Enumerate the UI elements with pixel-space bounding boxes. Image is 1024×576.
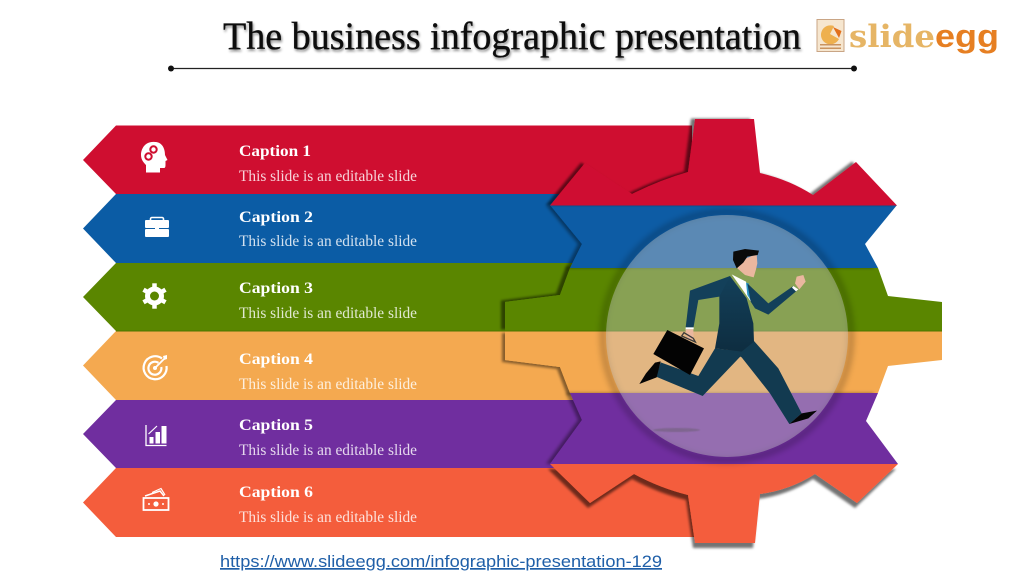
caption 3: Caption 3 — [239, 280, 313, 297]
torso — [715, 276, 754, 352]
band: purple arrow — [83, 400, 610, 468]
head — [737, 254, 757, 277]
caption 1: This slide is an editable slide — [239, 168, 417, 185]
running businessman — [639, 249, 817, 432]
band: coral arrow — [83, 468, 695, 537]
caption 5: This slide is an editable slide — [239, 442, 417, 459]
band: green arrow — [83, 263, 610, 331]
source link text: https://www.slideegg.com/infographic-presentation-129 — [220, 552, 662, 571]
back arm — [686, 276, 733, 328]
caption 6: This slide is an editable slide — [239, 509, 417, 526]
caption 5 — [239, 417, 417, 459]
front arm — [747, 283, 798, 315]
caption 1 — [239, 143, 417, 185]
shadow under man — [653, 428, 700, 432]
hair — [733, 249, 759, 268]
caption 4: This slide is an editable slide — [239, 376, 417, 393]
caption 2: This slide is an editable slide — [239, 233, 417, 250]
caption 6: Caption 6 — [239, 484, 313, 501]
caption 3: This slide is an editable slide — [239, 305, 417, 322]
gear segment: purple — [550, 393, 898, 464]
caption 2 — [239, 209, 417, 250]
icon: bar chart — [146, 425, 166, 446]
logo: slideegg: slide — [849, 19, 935, 55]
band: blue arrow — [83, 194, 610, 263]
title: The business infographic presentation — [223, 15, 801, 58]
band: red arrow — [83, 126, 692, 194]
briefcase — [653, 330, 704, 375]
centre circle — [603, 212, 851, 460]
gear segment: blue — [550, 205, 897, 268]
icon: banknotes — [144, 488, 168, 510]
caption 4: Caption 4 — [239, 351, 313, 368]
caption 3 — [239, 280, 417, 322]
collar — [732, 274, 752, 303]
caption 5: Caption 5 — [239, 417, 313, 434]
icon: head with gears — [141, 142, 168, 172]
tie — [746, 283, 753, 304]
icon: gear — [144, 283, 166, 309]
caption 2: Caption 2 — [239, 209, 313, 226]
cuffs and hands — [685, 275, 806, 340]
gear segment: green — [505, 268, 942, 331]
rear shoe — [639, 361, 661, 384]
gear segment: coral — [550, 464, 898, 543]
gear segment: red — [550, 119, 897, 206]
rear leg — [656, 348, 745, 396]
gear segment: orange — [505, 331, 942, 393]
front leg — [730, 341, 802, 424]
icon: target — [144, 355, 167, 379]
band: orange arrow — [83, 331, 610, 400]
logo: slideegg — [817, 18, 999, 55]
caption 6 — [239, 484, 417, 526]
caption 4 — [239, 351, 417, 393]
logo: slideegg: egg — [935, 18, 999, 54]
caption 1: Caption 1 — [239, 143, 311, 160]
title rule with end dots — [168, 66, 857, 72]
icon: briefcase — [145, 218, 169, 237]
front shoe — [789, 411, 817, 424]
